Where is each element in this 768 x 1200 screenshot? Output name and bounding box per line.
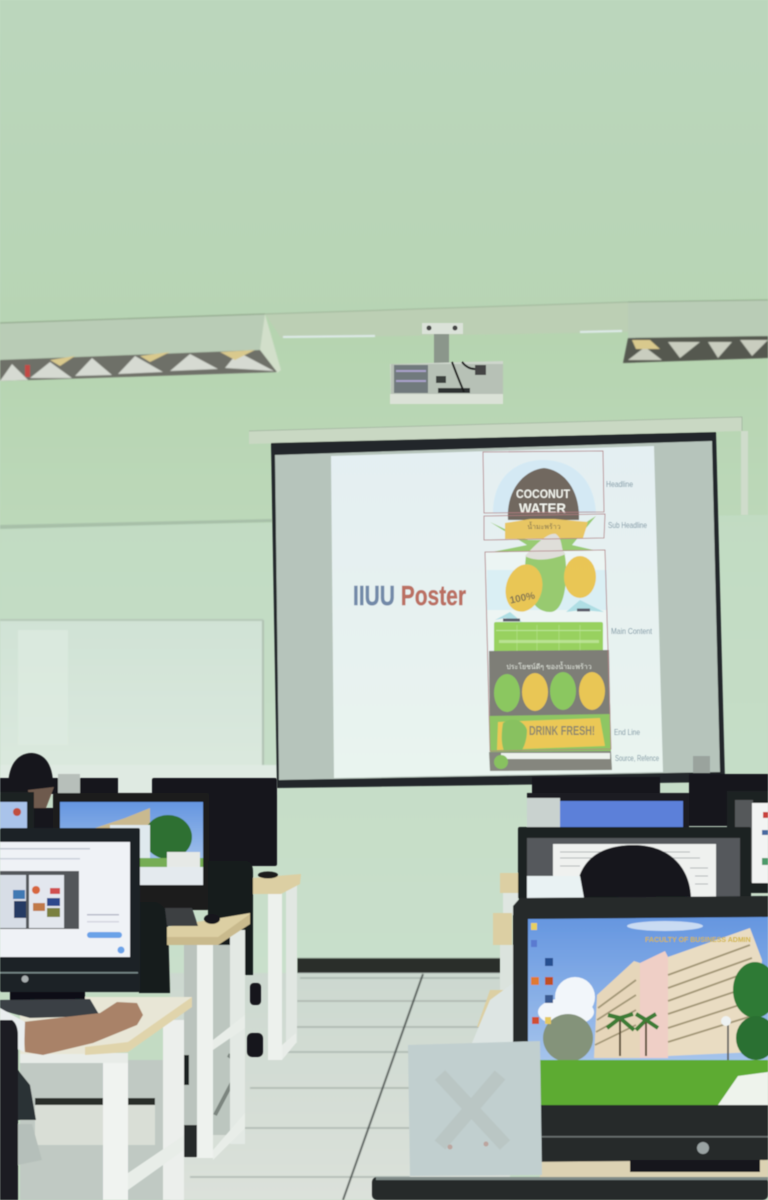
- keyboard and mouse desk two: [165, 908, 220, 926]
- wallpaper sky: [528, 917, 768, 1105]
- source strip: [489, 751, 612, 771]
- desk surface right: [540, 1160, 768, 1180]
- wallpaper distant trees: [543, 1014, 593, 1062]
- blue monitor: [527, 793, 689, 828]
- front chair: [0, 1020, 42, 1200]
- under desk shadows: [184, 945, 236, 1157]
- coconut: [508, 468, 579, 520]
- benefit circles: [494, 672, 605, 712]
- wall seam: [0, 519, 272, 529]
- large monitor with faculty wallpaper: [513, 896, 768, 1162]
- nutrition table: [494, 622, 603, 656]
- monitor stand: [630, 1160, 760, 1172]
- yellow badge right: [564, 556, 596, 598]
- right edge monitor: [727, 791, 768, 893]
- wallpaper trees: [607, 962, 768, 1076]
- desk front: [20, 997, 192, 1200]
- left light fixture: [0, 314, 281, 381]
- palm leaves: [490, 516, 602, 556]
- desk three: [253, 872, 301, 1060]
- wallpaper building: [594, 928, 762, 1058]
- poster annotations: Source, Refence: [615, 753, 659, 763]
- poster annotations: End Line: [614, 727, 640, 737]
- right light fixture: [623, 300, 768, 363]
- end line banner: DRINK FRESH!: [529, 723, 595, 738]
- screen housing: [249, 417, 742, 444]
- poster example: น้ำมะพร้าว: [527, 520, 561, 531]
- monitor with campus wallpaper: [53, 793, 209, 910]
- projector: [390, 323, 503, 404]
- student shirt: [472, 983, 516, 1043]
- ceiling lights and beam: [0, 300, 768, 381]
- screen surface: [275, 441, 720, 780]
- small monitor left: [0, 792, 34, 832]
- browser page content: [0, 848, 124, 954]
- screen frame: [271, 432, 725, 788]
- desk two: [167, 913, 250, 1160]
- poster example: 100%: [509, 590, 536, 607]
- desktop icons: [531, 923, 553, 1024]
- yellow badge: [500, 560, 548, 616]
- floor: [170, 973, 510, 1200]
- end line banner: [489, 714, 611, 757]
- ceiling beam: [265, 302, 630, 338]
- poster annotations: [606, 479, 659, 763]
- whiteboard: [0, 619, 277, 795]
- student white collar: [527, 876, 584, 898]
- green coconut: [525, 552, 566, 612]
- wallpaper clouds: [538, 921, 703, 1026]
- sensor box: [693, 756, 710, 773]
- wallpaper lawn: [528, 1060, 768, 1105]
- lower wall: [0, 515, 768, 980]
- projector body: [390, 361, 503, 404]
- poster example: WATER: [519, 500, 566, 516]
- light strips: [283, 331, 622, 337]
- ribbon: [505, 519, 588, 539]
- projection screen: [249, 417, 748, 788]
- left workstations: [0, 753, 301, 1200]
- slide title: IIUU Poster: [353, 580, 466, 611]
- chair bases: [247, 983, 263, 1057]
- monitor with document: [518, 827, 751, 899]
- back black monitors: [532, 774, 768, 826]
- palm trees: [495, 600, 604, 622]
- baseboard: [297, 958, 501, 973]
- slide: [331, 446, 663, 778]
- poster annotations: Headline: [606, 479, 633, 489]
- guide boxes: [483, 451, 611, 751]
- chairs: [139, 861, 253, 993]
- poster main panel: [486, 550, 607, 650]
- upper wall: [0, 298, 768, 527]
- wallpaper caption: FACULTY OF BUSINESS ADMIN: [645, 937, 751, 944]
- benefits heading: ประโยชน์ดีๆ ของน้ำมะพร้าว: [506, 660, 592, 671]
- ceiling: [0, 0, 768, 322]
- poster annotations: Sub Headline: [608, 520, 647, 530]
- desk corners: [477, 873, 518, 1027]
- student head: [576, 845, 691, 898]
- poster example: [483, 451, 612, 771]
- dark benefits panel: [489, 650, 611, 752]
- projector mount: [422, 323, 463, 364]
- gray card box: [408, 1041, 542, 1176]
- back monitor row: [0, 774, 277, 866]
- right workstations: [372, 774, 768, 1200]
- student with cap: [8, 753, 55, 828]
- foreground monitor top: [372, 1177, 768, 1200]
- headline: COCONUT: [516, 487, 571, 501]
- poster annotations: Main Content: [611, 626, 653, 636]
- keyboard front: [0, 999, 100, 1018]
- front monitor: [0, 828, 140, 1000]
- sky arc: [493, 460, 596, 513]
- arm on mouse: [0, 1002, 143, 1055]
